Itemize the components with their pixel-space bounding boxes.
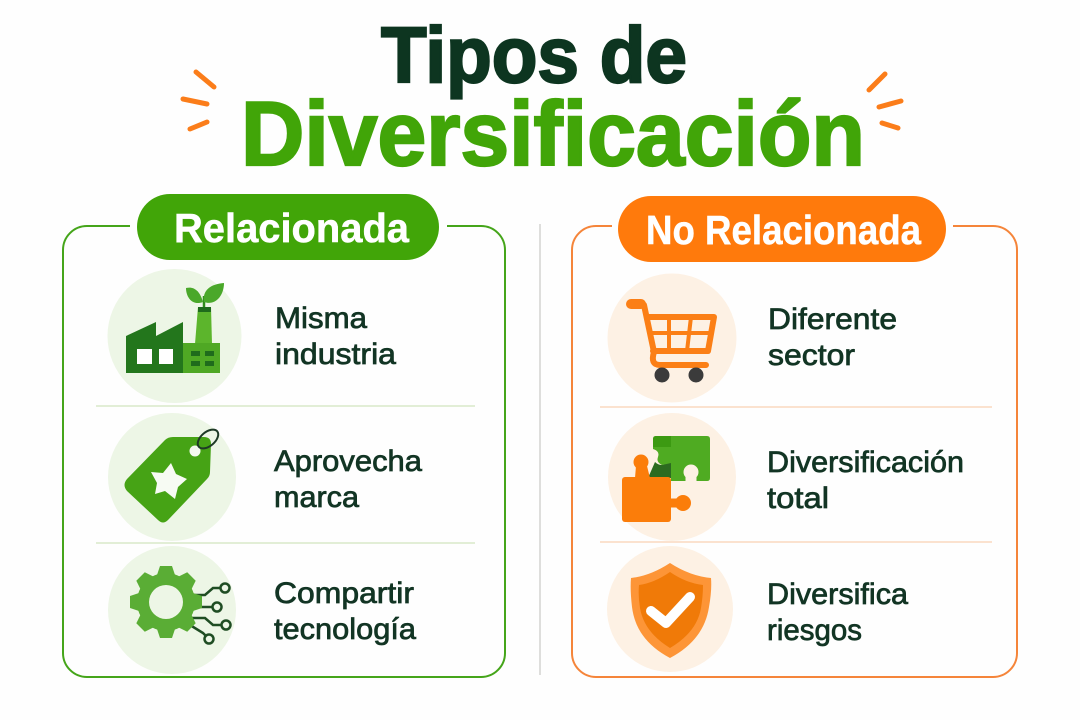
panel: relacionada <box>63 194 505 677</box>
heading: no relacionada <box>618 196 946 262</box>
text: diversificacion total: total <box>767 482 829 515</box>
title: Diversificación <box>241 84 865 185</box>
heading: relacionada: Relacionada <box>174 205 410 251</box>
heading: relacionada <box>137 194 439 260</box>
panel: no relacionada <box>572 196 1017 677</box>
text: diversificacion total <box>767 446 964 515</box>
text: misma industria <box>275 302 396 371</box>
text: misma industria: industria <box>275 338 396 371</box>
text: misma industria: Misma <box>275 302 367 335</box>
text: diferente sector <box>768 303 897 372</box>
title <box>241 10 865 185</box>
heading: no relacionada: No Relacionada <box>646 207 922 253</box>
text: compartir tecnologia: tecnología <box>274 613 416 646</box>
icon: factory with sprout <box>108 269 242 403</box>
text: aprovecha marca: Aprovecha <box>274 445 422 478</box>
text: compartir tecnologia <box>274 577 416 646</box>
text: compartir tecnologia: Compartir <box>274 577 414 610</box>
text: diversificacion total: Diversificación <box>767 446 964 479</box>
icon: shield with check <box>607 546 733 672</box>
text: diferente sector: sector <box>768 339 855 372</box>
icon: left sparks <box>183 72 214 129</box>
icon: right sparks <box>869 74 901 128</box>
text: diferente sector: Diferente <box>768 303 897 336</box>
text: aprovecha marca <box>274 445 422 514</box>
icon: shopping cart <box>608 274 736 402</box>
text: diversifica riesgos: Diversifica <box>767 578 908 611</box>
title: Tipos de <box>381 10 687 99</box>
text: aprovecha marca: marca <box>274 481 359 514</box>
text: diversifica riesgos <box>767 578 908 647</box>
icon: puzzle <box>608 413 736 541</box>
icon: gear with circuit <box>108 546 236 674</box>
text: diversifica riesgos: riesgos <box>767 614 862 647</box>
icon: price tag with star <box>108 413 236 541</box>
